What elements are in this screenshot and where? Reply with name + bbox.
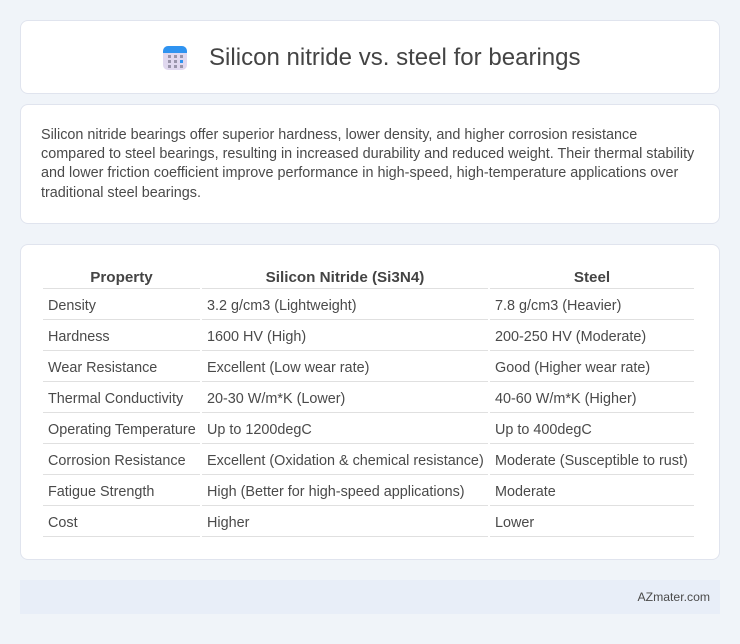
row: Hardness <box>48 329 646 345</box>
row: Wear Resistance: Good (Higher wear rate) <box>495 360 650 376</box>
row: Cost: Higher <box>207 515 249 531</box>
row: Operating Temperature <box>48 422 592 438</box>
row: Thermal Conductivity <box>48 391 637 407</box>
row: Fatigue Strength: Moderate <box>495 484 556 500</box>
row: Corrosion Resistance: Moderate (Susceptible to rust) <box>495 453 688 469</box>
row: Density: 3.2 g/cm3 (Lightweight) <box>207 298 357 314</box>
header: Steel: Steel <box>574 269 610 286</box>
row: Corrosion Resistance: Excellent (Oxidation & chemical resistance) <box>207 453 484 469</box>
row: Corrosion Resistance <box>48 453 688 469</box>
header: Silicon Nitride: Silicon Nitride (Si3N4) <box>266 269 424 286</box>
row: Density <box>48 298 621 314</box>
row: Cost: Cost <box>48 515 78 531</box>
panel: title card <box>20 20 720 94</box>
comparison table <box>43 269 694 537</box>
text block: description: traditional steel bearings. <box>41 185 201 201</box>
row: Corrosion Resistance: Corrosion Resistance <box>48 453 186 469</box>
header: Property: Property <box>90 269 153 286</box>
row: Cost: Lower <box>495 515 534 531</box>
title: Silicon nitride vs. steel for bearings <box>209 44 581 71</box>
row: Hardness: 200-250 HV (Moderate) <box>495 329 646 345</box>
footer bar <box>20 580 720 614</box>
row: Fatigue Strength <box>48 484 556 500</box>
text block: description: Silicon nitride bearings offer superior hardness, lower density, and higher corrosion resistance <box>41 127 637 143</box>
panel: description card <box>20 104 720 224</box>
row: Fatigue Strength: High (Better for high-speed applications) <box>207 484 465 500</box>
row: Cost <box>48 515 534 531</box>
row: Operating Temperature: Operating Temperature <box>48 422 196 438</box>
row: Hardness: Hardness <box>48 329 110 345</box>
text block: description <box>41 127 694 201</box>
row: Operating Temperature: Up to 400degC <box>495 422 592 438</box>
row: Operating Temperature: Up to 1200degC <box>207 422 312 438</box>
row: Wear Resistance: Wear Resistance <box>48 360 157 376</box>
row: Thermal Conductivity: Thermal Conductivity <box>48 391 183 407</box>
row: Thermal Conductivity: 40-60 W/m*K (Higher) <box>495 391 637 407</box>
text block: description: compared to steel bearings, resulting in increased durability and reduced weight. Their thermal stability <box>41 146 694 162</box>
row: Density: 7.8 g/cm3 (Heavier) <box>495 298 621 314</box>
row: Fatigue Strength: Fatigue Strength <box>48 484 154 500</box>
panel: comparison table card <box>20 244 720 560</box>
row: Wear Resistance <box>48 360 650 376</box>
text block: description: and lower friction coefficient improve performance in high-speed, high-temperature applications over <box>41 165 678 181</box>
row: Wear Resistance: Excellent (Low wear rate) <box>207 360 369 376</box>
footer source text: AZmater.com <box>638 590 710 604</box>
icon: calendar grid <box>163 46 187 70</box>
row: Density: Density <box>48 298 96 314</box>
row: Thermal Conductivity: 20-30 W/m*K (Lower) <box>207 391 345 407</box>
row: Hardness: 1600 HV (High) <box>207 329 306 345</box>
